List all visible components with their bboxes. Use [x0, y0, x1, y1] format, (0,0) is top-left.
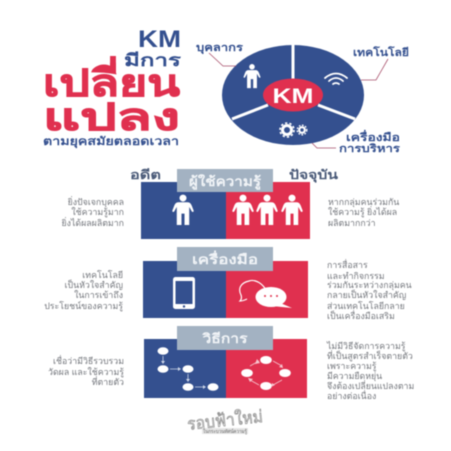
panel: ผู้ใช้ความรู้	[62, 169, 399, 239]
subtitle: ตามยุคสมัยตลอดเวลา	[43, 135, 179, 149]
label: บุคลากร: บุคลากร	[196, 42, 243, 55]
present text: และทำกิจกรรม	[327, 271, 385, 281]
logo tagline text: ในกระบวนทัศน์ความรู้	[203, 428, 247, 435]
past text: เป็นหัวใจสำคัญ	[65, 279, 123, 290]
present block	[226, 261, 308, 318]
icon: smartphone	[173, 277, 195, 309]
past text: ใช้ความรู้มาก	[71, 207, 124, 218]
present text: จึงต้องเปลี่ยนแปลงตาม	[327, 380, 414, 391]
past text: ในการเข้าถึง	[74, 290, 123, 300]
present text: มีความยืดหยุ่น	[327, 371, 382, 382]
present text: ใช้ความรู้ ยิ่งได้ผล	[328, 206, 397, 218]
present block	[226, 182, 310, 239]
logo wordmark: รอบฟ้าใหม่	[186, 406, 264, 434]
blue disc	[222, 45, 364, 145]
label: การบริหาร: การบริหาร	[339, 143, 400, 155]
header	[177, 247, 273, 271]
segment dividers	[232, 44, 355, 119]
past block	[144, 339, 226, 398]
KM label: KM	[272, 85, 314, 108]
logo	[186, 406, 264, 435]
past text: ที่ตายตัว	[92, 376, 124, 387]
icon: three people	[232, 195, 303, 225]
past text	[48, 355, 124, 387]
panel: วิธีการ	[48, 326, 414, 401]
present text: หากกลุ่มคนร่วมกัน	[328, 197, 399, 208]
header text: วิธีการ	[202, 331, 248, 346]
title line: มีการ: มีการ	[124, 50, 182, 70]
present text: ผลิตมากกว่า	[328, 218, 376, 228]
present text	[328, 197, 399, 228]
icon: linear flow diagram	[158, 347, 218, 391]
KM circle diagram	[196, 42, 409, 155]
past text: เชื่อว่ามีวิธีรวบรวม	[53, 355, 124, 366]
past text: ประโยชน์ของความรู้	[44, 301, 123, 312]
column label: อดีต: อดีต	[130, 168, 161, 182]
past text	[44, 270, 123, 312]
KM centre ellipse	[263, 78, 323, 112]
header	[177, 169, 273, 192]
present text: กลายเป็นหัวใจสำคัญ	[327, 289, 406, 300]
label: เครื่องมือ: เครื่องมือ	[346, 129, 400, 144]
past block	[141, 182, 226, 239]
icon: person	[244, 64, 260, 88]
present text: ที่เป็นสูตรสำเร็จตายตัว	[327, 350, 413, 362]
header text: ผู้ใช้ความรู้	[189, 173, 261, 190]
icon: chat bubbles	[240, 280, 292, 308]
present text: เป็นเครื่องมือเสริม	[327, 310, 395, 321]
column label: ปัจจุบัน: ปัจจุบัน	[289, 168, 339, 183]
icon: wifi	[325, 74, 347, 84]
icon: gears	[280, 123, 307, 137]
past text: วัดผล และใช้ความรู้	[48, 367, 124, 378]
leader line: เครื่องมือ	[312, 143, 336, 148]
title line: เปลี่ยน: เปลี่ยน	[43, 56, 180, 105]
past text: ยิ่งปัจเจกบุคคล	[68, 196, 124, 208]
panel: เครื่องมือ	[44, 247, 412, 321]
logo tagline	[202, 428, 248, 434]
past text: เทคโนโลยี	[82, 270, 123, 280]
present text: ส่วนเทคโนโลยีกลาย	[327, 301, 405, 311]
past text: ยิ่งได้ผลผลิตมาก	[62, 217, 124, 228]
title line: KM: KM	[138, 26, 181, 53]
present text: อย่างต่อเนื่อง	[327, 390, 376, 401]
present text: การสื่อสาร	[327, 259, 368, 270]
header text: เครื่องมือ	[192, 250, 258, 267]
past block	[143, 261, 226, 318]
present text: ร่วมกันระหว่างกลุ่มคน	[327, 280, 412, 291]
header	[177, 326, 273, 350]
present text	[326, 341, 414, 401]
title	[43, 26, 182, 149]
icon: one person	[172, 195, 194, 225]
leader line: บุคลากร	[209, 53, 236, 66]
present block	[226, 339, 307, 398]
label: เทคโนโลยี: เทคโนโลยี	[353, 46, 409, 59]
leader line: เทคโนโลยี	[361, 59, 388, 80]
title line: แปลง: แปลง	[43, 97, 180, 139]
past text	[62, 196, 124, 228]
icon: cycle diagram	[241, 356, 291, 390]
present text: เพราะความรู้	[327, 361, 377, 372]
present text	[327, 259, 412, 321]
present text: ไม่มีวิธีจัดการความรู้	[326, 341, 406, 352]
